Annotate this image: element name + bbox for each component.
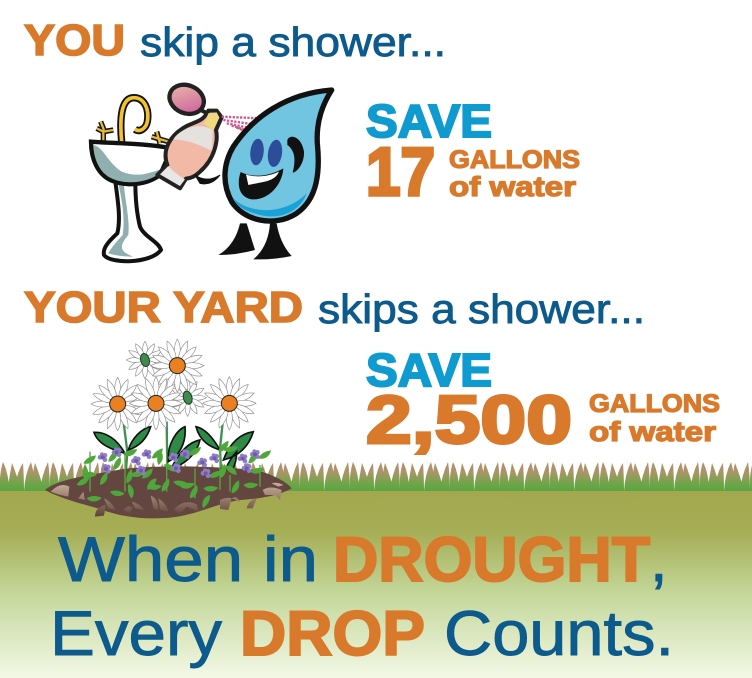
save 2,500 gallons callout: 2,500 (366, 382, 572, 458)
rocks (51, 483, 283, 517)
tagline: DROP (240, 599, 425, 669)
save 17 gallons callout: GALLONS (449, 146, 580, 174)
icon: sink (91, 98, 172, 261)
ground gradient (0, 490, 752, 678)
heading: you skip a shower: YOU (24, 16, 125, 65)
save 2,500 gallons callout: SAVE (366, 344, 492, 396)
save 17 gallons callout (366, 95, 580, 210)
heading: you skip a shower: skip a shower... (140, 19, 446, 65)
save 17 gallons callout: SAVE (366, 95, 492, 147)
tagline: Every (50, 599, 223, 669)
illustration: daisies in a garden bed (45, 339, 292, 518)
save 2,500 gallons callout: of water (589, 416, 716, 447)
save 17 gallons callout: 17 (366, 134, 435, 210)
heading: you skip a shower (24, 16, 446, 65)
icon: water drop character (195, 90, 332, 259)
heading: your yard skips a shower: YOUR YARD (24, 283, 303, 332)
tagline: , (650, 525, 668, 595)
illustration: sink, perfume bottle and water drop (91, 80, 332, 261)
violet blossoms (98, 447, 260, 478)
tagline: When in (58, 525, 318, 595)
tagline: DROUGHT (333, 525, 650, 595)
heading: your yard skips a shower (24, 283, 645, 332)
daisy flowers (91, 339, 256, 431)
icon: perfume bottle (157, 80, 222, 188)
tagline: Counts. (444, 599, 674, 669)
save 2,500 gallons callout (366, 344, 720, 458)
soil mound (45, 466, 292, 518)
stems and large leaves (94, 415, 253, 485)
tagline (50, 525, 674, 669)
icon: perfume spray (222, 117, 280, 140)
save 17 gallons callout: of water (449, 171, 576, 202)
heading: your yard skips a shower: skips a shower... (318, 286, 645, 332)
ground-cover foliage (77, 441, 271, 508)
grass strip (0, 460, 752, 491)
save 2,500 gallons callout: GALLONS (589, 390, 720, 418)
